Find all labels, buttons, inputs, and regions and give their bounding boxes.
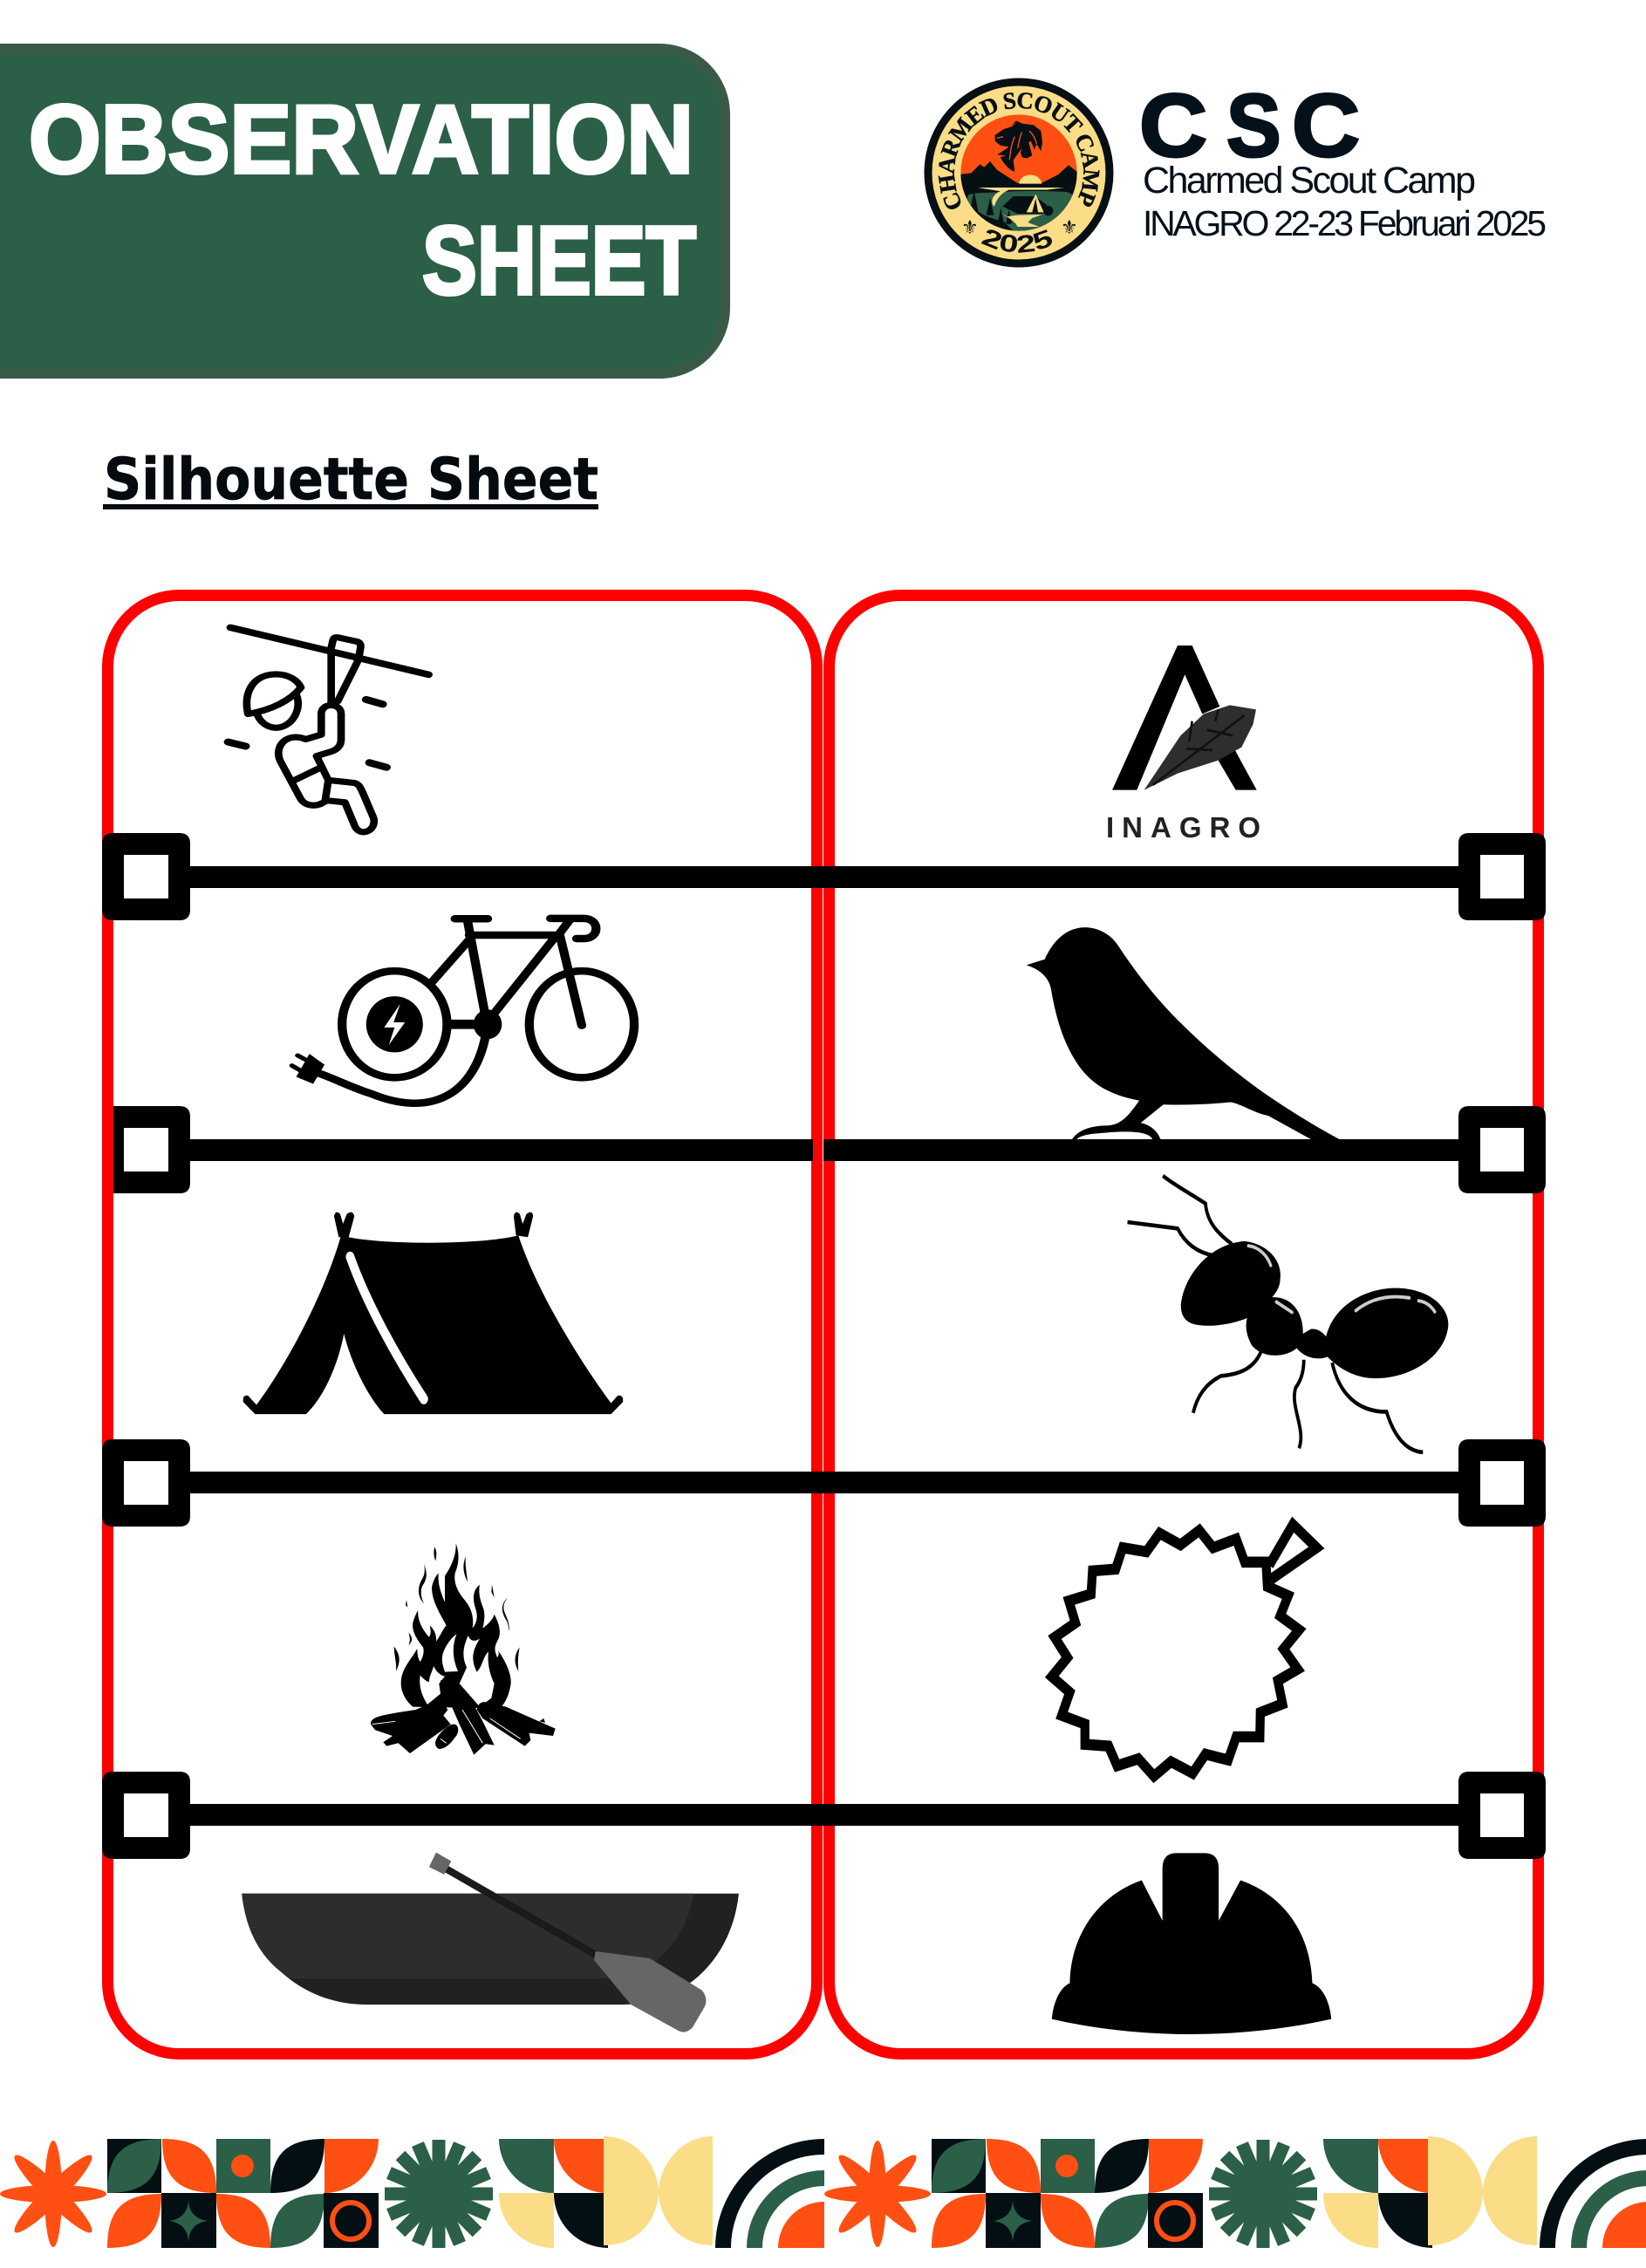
badge ring text: 2025	[981, 229, 1052, 253]
quarter shapes	[499, 2136, 713, 2248]
icon: zip line rider	[229, 627, 428, 832]
icon: bird	[1027, 927, 1339, 1139]
rainbow arcs	[715, 2139, 824, 2248]
icon: tent	[243, 1213, 623, 1414]
sunburst	[385, 2140, 493, 2248]
badge ring text: ⚜	[1061, 217, 1078, 239]
brand text block: INAGRO 22-23 Februari 2025	[1143, 203, 1547, 243]
divider row 1	[102, 833, 1546, 920]
title: OBSERVATION	[29, 85, 693, 194]
brand text block: Charmed Scout Camp	[1143, 160, 1476, 202]
icon: INAGRO logo	[1106, 646, 1260, 844]
flower	[0, 2141, 106, 2247]
icon: hard hat	[1052, 1853, 1331, 2034]
badge scene	[960, 113, 1079, 233]
panel: left column	[108, 595, 816, 2053]
divider row 3	[102, 1439, 1546, 1527]
badge ring text: CHARMED SCOUT CAMP	[939, 92, 1100, 209]
panel: right column	[829, 595, 1539, 2053]
badge ring text	[939, 92, 1100, 253]
divider row 2	[113, 1106, 1546, 1193]
title: SHEET	[422, 207, 696, 315]
icon: durian	[1052, 1525, 1316, 1776]
brand text block: C	[1139, 77, 1207, 175]
divider row 4	[102, 1772, 1546, 1859]
brand text block	[1139, 75, 1547, 243]
camp badge logo	[925, 79, 1113, 267]
lion head	[995, 120, 1042, 172]
pattern tile 2	[824, 2136, 1646, 2248]
icon: electric bicycle	[292, 919, 634, 1103]
pattern tile 1	[0, 2136, 824, 2248]
header banner	[0, 49, 725, 373]
icon: INAGRO logo: INAGRO	[1106, 811, 1260, 844]
brand text block: C	[1292, 77, 1360, 175]
geometric tiles	[107, 2139, 379, 2248]
badge ring text: ⚜	[961, 217, 979, 239]
footer pattern strip	[0, 2136, 1646, 2248]
icon: canoe and paddle	[242, 1853, 739, 2032]
title	[29, 85, 696, 315]
icon: ant	[1128, 1176, 1448, 1452]
icon: campfire	[371, 1543, 556, 1755]
brand text block: S	[1226, 75, 1281, 175]
section heading: Silhouette Sheet	[104, 446, 598, 513]
